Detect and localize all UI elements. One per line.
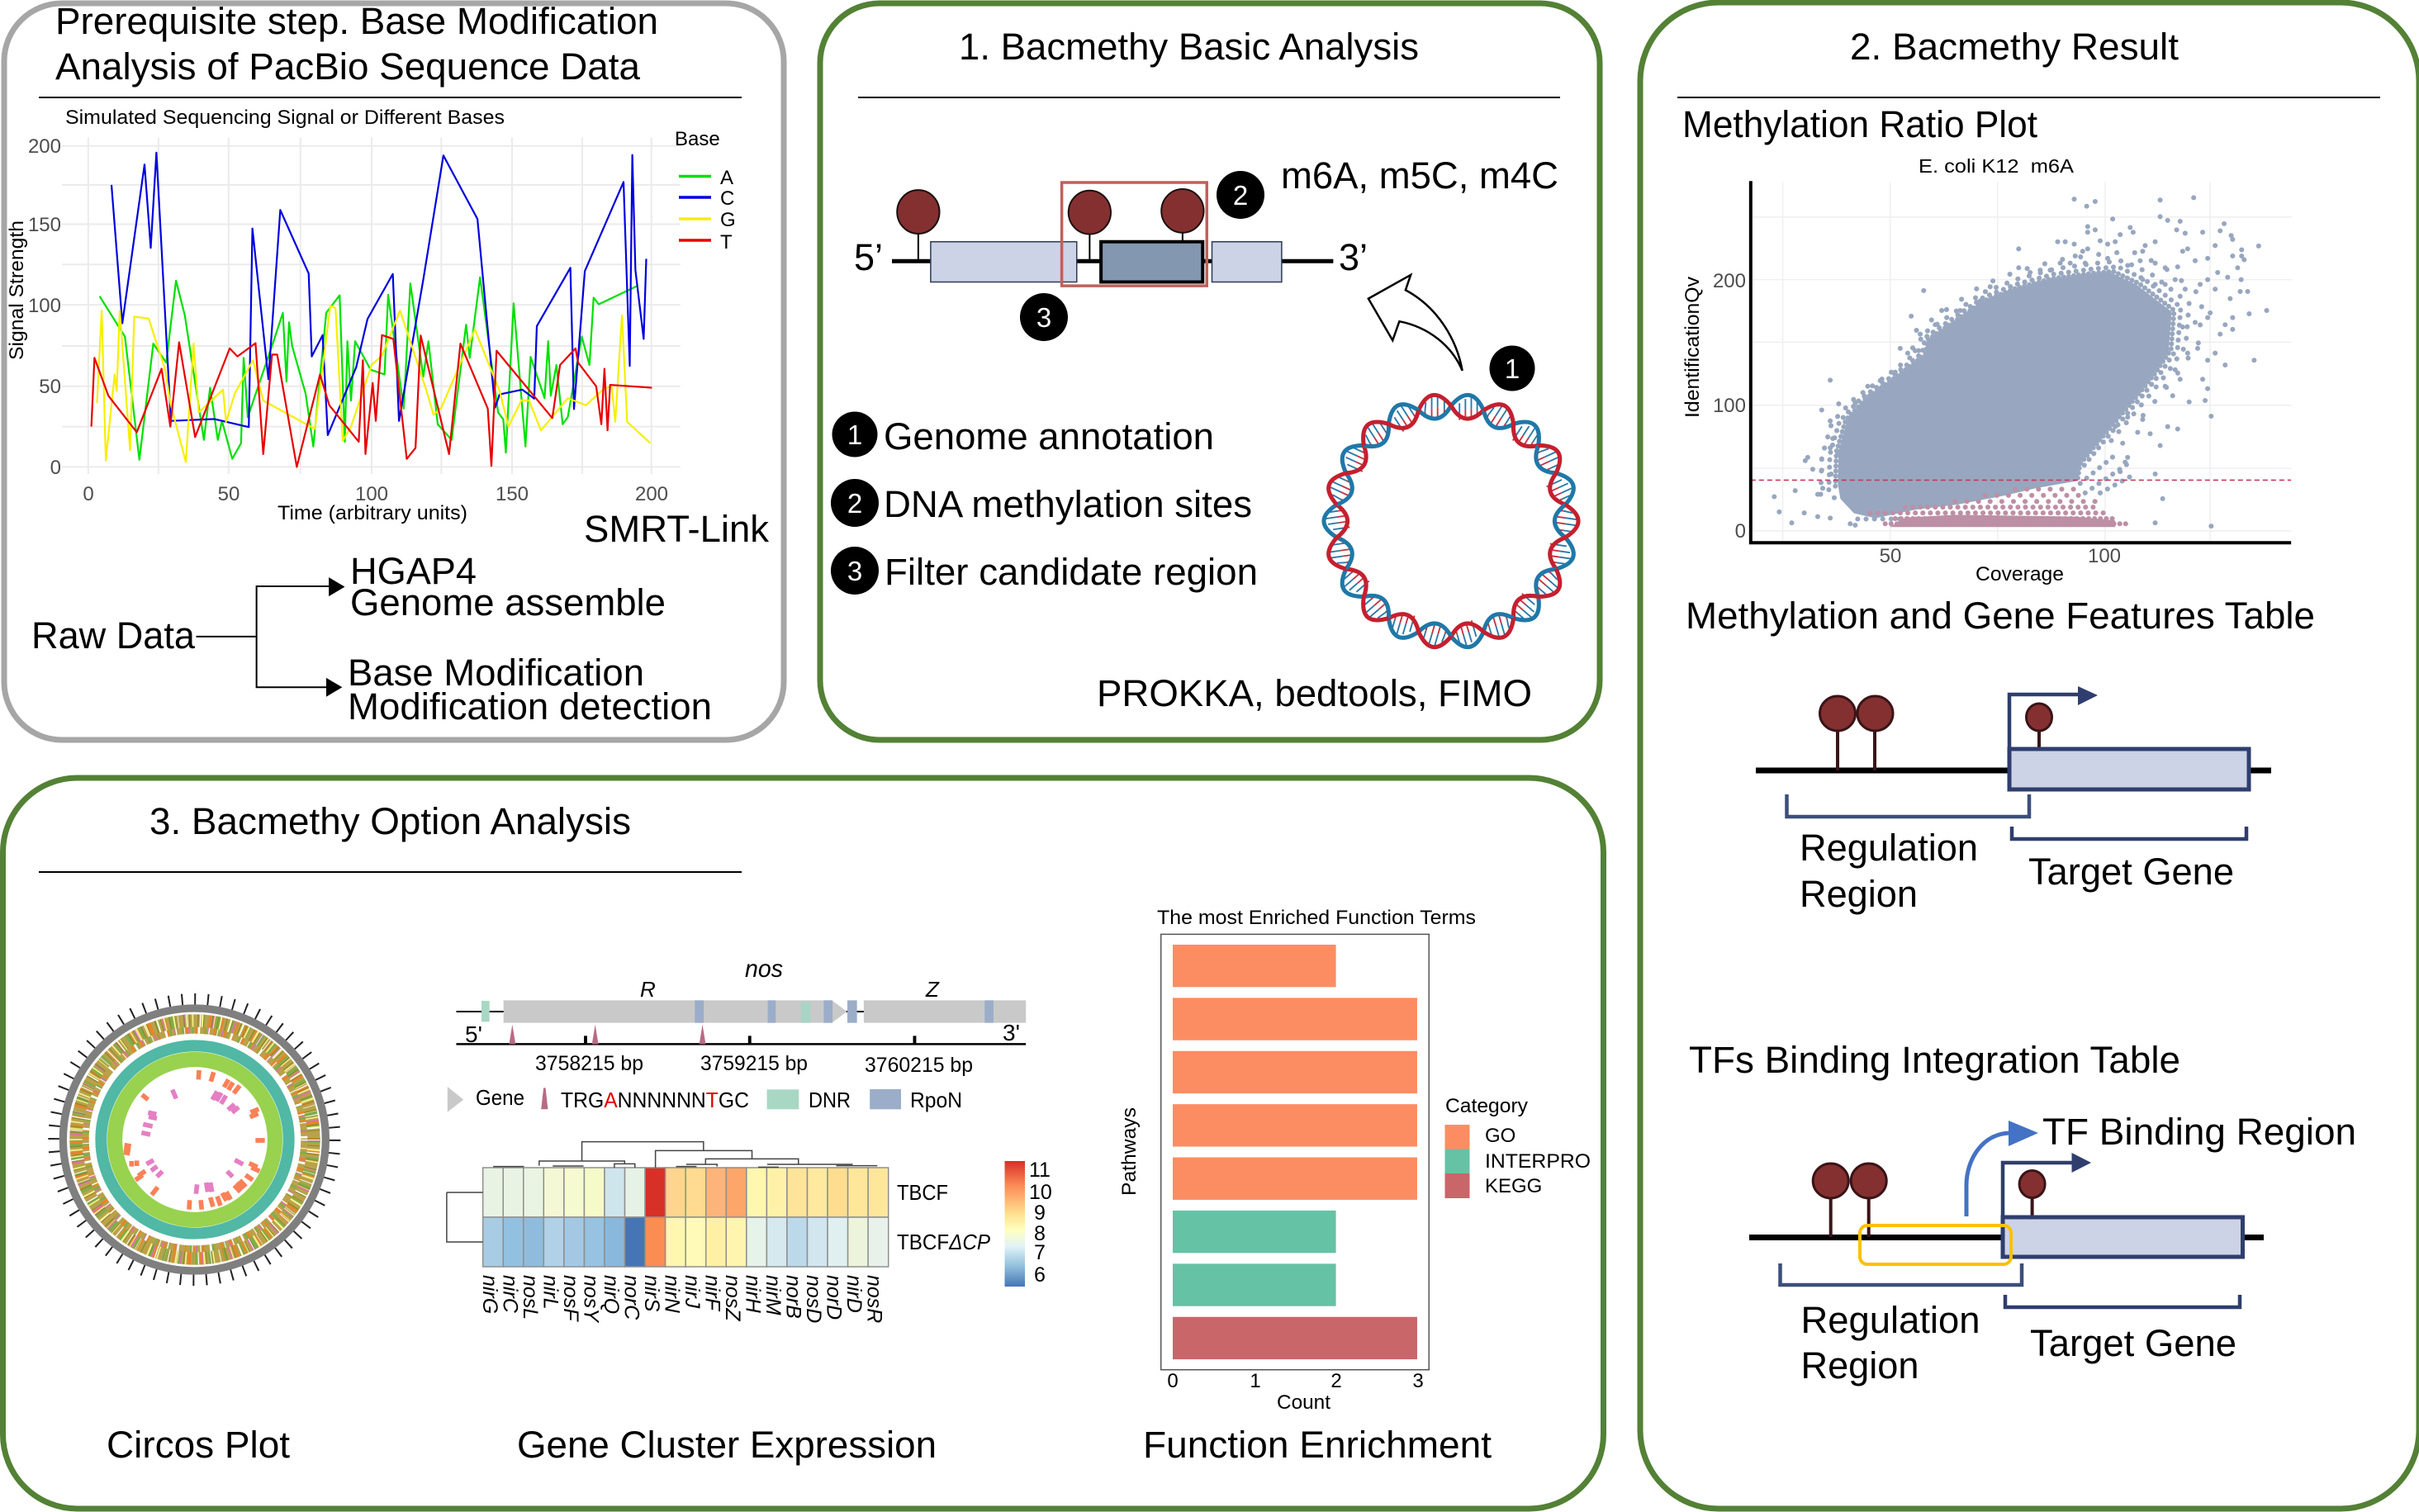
gene track: nos cluster: 3760215 bp <box>865 1054 973 1077</box>
scatter plot: coverage vs identification QV: E. coli K12 m6A <box>1919 155 2075 177</box>
legend: expression colour bar: 6 <box>1034 1263 1046 1287</box>
legend: expression colour bar: 10 <box>1029 1181 1052 1204</box>
title: prerequisite step: Analysis of PacBio Sequence Data <box>55 45 641 88</box>
scatter plot: coverage vs identification QV: Coverage <box>1976 563 2064 585</box>
heatmap: gene cluster expression: nirS <box>640 1275 663 1312</box>
line chart: simulated sequencing signal: 0 <box>83 483 94 505</box>
bar chart: function enrichment <box>1118 907 1591 1414</box>
heatmap: gene cluster expression: norB <box>781 1275 804 1319</box>
legend: expression colour bar: 11 <box>1029 1159 1051 1182</box>
line chart: simulated sequencing signal: Time (arbitrary units) <box>277 502 467 524</box>
flow: raw data branches <box>31 550 712 728</box>
heatmap: gene cluster expression: nirQ <box>600 1275 623 1314</box>
heatmap: gene cluster expression: nosZ <box>721 1275 744 1321</box>
gene track: nos cluster <box>448 955 1026 1112</box>
icon: circular DNA <box>1321 395 1581 652</box>
heading: TFs binding integration table: TFs Binding Integration Table <box>1689 1039 2180 1081</box>
step list <box>831 411 1258 595</box>
heatmap: gene cluster expression: nirN <box>661 1275 684 1314</box>
heatmap: gene cluster expression: nosR <box>862 1275 885 1323</box>
gene model with methylation sites: 5’ <box>854 236 883 278</box>
bar chart: function enrichment: The most Enriched Function Terms <box>1157 907 1476 929</box>
bar chart: function enrichment: Count <box>1277 1391 1330 1414</box>
gene track: nos cluster: 5' <box>465 1021 482 1047</box>
heading: result: 2. Bacmethy Result <box>1850 26 2179 68</box>
panel: basic analysis <box>820 3 1600 740</box>
diagram: TF binding region: Region <box>1800 1344 1919 1386</box>
legend: category: GO <box>1485 1125 1515 1147</box>
heading: methylation and gene features table: Methylation and Gene Features Table <box>1686 595 2315 637</box>
step list: 1 <box>847 419 862 450</box>
line chart: simulated sequencing signal: Signal Strength <box>6 220 28 360</box>
heatmap: gene cluster expression: nosY <box>580 1275 603 1324</box>
line chart: simulated sequencing signal: 100 <box>355 483 388 505</box>
heatmap: gene cluster expression: nirF <box>700 1275 723 1312</box>
step list: Filter candidate region <box>885 551 1258 593</box>
legend: expression colour bar: 7 <box>1034 1241 1046 1264</box>
legend: base <box>675 128 736 254</box>
heatmap: gene cluster expression: nosF <box>559 1275 582 1322</box>
heatmap: gene cluster expression: nosL <box>519 1275 542 1320</box>
heatmap: gene cluster expression: TBCFΔCP <box>897 1230 991 1254</box>
legend: expression colour bar: 8 <box>1034 1222 1046 1245</box>
legend: category: INTERPRO <box>1485 1150 1591 1173</box>
bar chart: function enrichment: 0 <box>1167 1370 1179 1392</box>
bar chart: function enrichment: Pathways <box>1118 1107 1141 1196</box>
legend: gene track <box>448 1085 962 1112</box>
flow: raw data branches: Raw Data <box>31 614 196 656</box>
heatmap: gene cluster expression: norC <box>619 1275 643 1320</box>
legend: expression colour bar <box>1004 1159 1052 1287</box>
diagram: regulation region and target gene: Target Gene <box>2028 851 2234 893</box>
heading: basic analysis: 1. Bacmethy Basic Analysis <box>959 26 1419 68</box>
diagram: TF binding region: Regulation <box>1800 1299 1980 1341</box>
scatter plot: coverage vs identification QV: 200 <box>1713 270 1746 292</box>
label: tools: PROKKA, bedtools, FIMO <box>1097 672 1532 714</box>
diagram: regulation region and target gene <box>1756 686 2271 915</box>
step list: Genome annotation <box>884 415 1214 457</box>
line chart: simulated sequencing signal: 150 <box>496 483 529 505</box>
heatmap: gene cluster expression: nirD <box>842 1275 866 1313</box>
scatter plot: coverage vs identification QV <box>1681 155 2291 585</box>
line chart: simulated sequencing signal: 200 <box>28 135 61 158</box>
label: gene cluster expression: Gene Cluster Expression <box>517 1424 937 1466</box>
scatter plot: coverage vs identification QV: 50 <box>1880 545 1901 567</box>
line chart: simulated sequencing signal: Simulated Sequencing Signal or Different Bases <box>65 107 505 129</box>
legend: gene track: TRGANNNNNNTGC <box>561 1088 749 1112</box>
legend: expression colour bar: 9 <box>1034 1202 1046 1225</box>
heatmap: gene cluster expression: nirM <box>761 1275 785 1315</box>
legend: category <box>1445 1095 1591 1198</box>
diagram: TF binding region: TF Binding Region <box>2042 1111 2356 1153</box>
legend: gene track: RpoN <box>910 1088 962 1112</box>
heading: methylation ratio plot: Methylation Ratio Plot <box>1682 103 2037 145</box>
title: prerequisite step: Prerequisite step. Base Modification <box>55 0 658 42</box>
gene track: nos cluster: 3758215 bp <box>535 1052 643 1075</box>
heatmap: gene cluster expression: nirH <box>742 1275 765 1314</box>
heatmap: gene cluster expression: nirJ <box>681 1275 704 1309</box>
chart: circos plot <box>54 999 334 1280</box>
badge: 1 near DNA <box>1490 345 1534 391</box>
heatmap: gene cluster expression: nosD <box>802 1275 825 1323</box>
line chart: simulated sequencing signal: 50 <box>39 376 61 398</box>
line chart: simulated sequencing signal: 150 <box>28 214 61 236</box>
scatter plot: coverage vs identification QV: 100 <box>1713 395 1746 417</box>
heatmap: gene cluster expression: TBCF <box>897 1180 948 1205</box>
heatmap: gene cluster expression: norD <box>823 1275 846 1320</box>
label: SMRT-Link: SMRT-Link <box>584 508 769 550</box>
title: prerequisite step <box>55 0 658 88</box>
label: modification types: m6A, m5C, m4C <box>1281 154 1558 197</box>
heading: option analysis: 3. Bacmethy Option Analysis <box>149 800 631 842</box>
line chart: simulated sequencing signal <box>6 107 736 524</box>
diagram: TF binding region <box>1749 1111 2356 1386</box>
scatter plot: coverage vs identification QV: 100 <box>2088 545 2121 567</box>
diagram: regulation region and target gene: Region <box>1800 873 1918 915</box>
line chart: simulated sequencing signal: 50 <box>218 483 240 505</box>
flow: raw data branches: HGAP4 <box>350 550 477 592</box>
flow: raw data branches: Genome assemble <box>350 581 666 623</box>
flow: raw data branches: Modification detection <box>348 685 712 728</box>
label: circos plot: Circos Plot <box>107 1424 290 1466</box>
step list: 2 <box>847 488 862 519</box>
heatmap: gene cluster expression: nirG <box>478 1275 501 1314</box>
scatter plot: coverage vs identification QV: 0 <box>1735 520 1746 543</box>
legend: base: A <box>720 167 733 189</box>
legend: base: G <box>720 209 736 231</box>
arrow: curved from genome to gene model <box>1368 275 1463 371</box>
gene model with methylation sites: 2 <box>1233 180 1248 211</box>
step list: DNA methylation sites <box>884 483 1252 525</box>
legend: category: Category <box>1445 1095 1528 1117</box>
diagram: regulation region and target gene: Regulation <box>1800 827 1978 869</box>
gene track: nos cluster: R <box>640 977 656 1002</box>
gene track: nos cluster: nos <box>745 955 783 983</box>
panel: option analysis <box>3 778 1604 1509</box>
legend: category: KEGG <box>1485 1175 1542 1197</box>
heatmap: gene cluster expression: nirC <box>499 1275 522 1314</box>
gene model with methylation sites: 3 <box>1036 302 1051 333</box>
bar chart: function enrichment: 3 <box>1412 1370 1424 1392</box>
legend: base: T <box>720 231 733 254</box>
gene track: nos cluster: Z <box>925 977 940 1002</box>
label: function enrichment: Function Enrichment <box>1143 1424 1492 1466</box>
line chart: simulated sequencing signal: 200 <box>635 483 668 505</box>
panel: prerequisite step <box>4 0 784 740</box>
gene model with methylation sites: 3’ <box>1339 236 1368 278</box>
line chart: simulated sequencing signal: 0 <box>50 457 61 479</box>
heatmap: gene cluster expression: nirL <box>538 1275 562 1310</box>
gene model with methylation sites <box>854 171 1368 341</box>
legend: gene track: Gene <box>476 1085 524 1110</box>
legend: base: Base <box>675 128 720 150</box>
panel: result <box>1640 2 2419 1509</box>
gene track: nos cluster: 3759215 bp <box>700 1052 808 1075</box>
bar chart: function enrichment: 2 <box>1330 1370 1342 1392</box>
diagram: TF binding region: Target Gene <box>2030 1322 2236 1364</box>
gene track: nos cluster: 3' <box>1003 1020 1020 1045</box>
line chart: simulated sequencing signal: 100 <box>28 295 61 317</box>
legend: base: C <box>720 187 734 210</box>
step list: 3 <box>847 556 862 586</box>
scatter plot: coverage vs identification QV: IdentificationQv <box>1681 277 1704 418</box>
legend: gene track: DNR <box>809 1088 851 1112</box>
heatmap: gene cluster expression <box>447 1142 1052 1324</box>
flow: raw data branches: Base Modification <box>348 652 644 694</box>
bar chart: function enrichment: 1 <box>1250 1370 1261 1392</box>
badge: 1 near DNA: 1 <box>1505 353 1520 384</box>
